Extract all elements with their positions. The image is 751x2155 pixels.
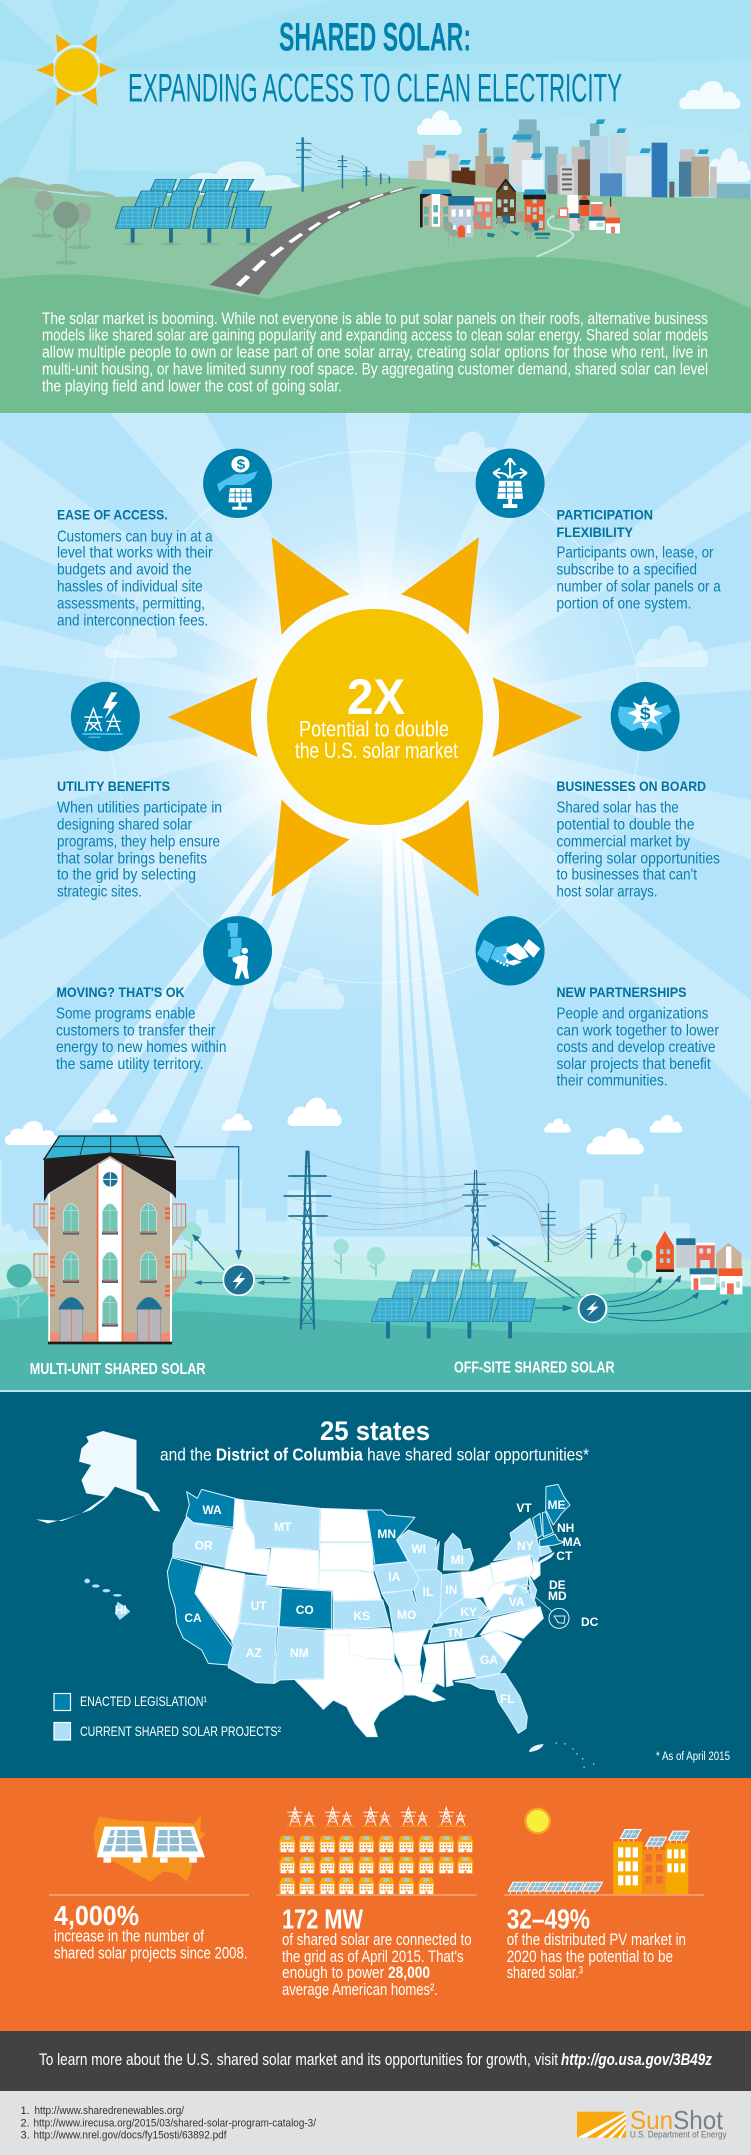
icon: utility towers with bolt (71, 682, 140, 751)
map state labels: MN (377, 1527, 396, 1541)
panel: state map section (0, 1392, 751, 1778)
text: moving (56, 984, 226, 1073)
stat: 32-49%: 32–49% (507, 1904, 590, 1935)
icon: US map with dollar sun: $ (640, 704, 651, 723)
footer references: http://www.sharedrenewables.org/ (34, 2105, 185, 2117)
map state labels: DE (549, 1578, 566, 1592)
call to action band: http://go.usa.gov/3B49z (561, 2050, 712, 2069)
icon: handshake (476, 916, 545, 986)
scene clouds (5, 1098, 682, 1154)
map legend (54, 1693, 281, 1740)
map state labels: NH (557, 1521, 574, 1535)
call to action band (0, 2031, 751, 2091)
intro text band (0, 308, 751, 413)
text: participation flexibility (556, 507, 721, 613)
text: new partnerships: can work together to lower (556, 1022, 720, 1039)
background bushes and trees (0, 177, 115, 265)
map state labels: WA (202, 1503, 222, 1517)
icon: sun, panels and buildings (507, 1808, 690, 1894)
map legend: CURRENT SHARED SOLAR PROJECTS² (80, 1723, 281, 1739)
stat: 172 MW: 172 MW (282, 1904, 363, 1935)
central sun: 2X: Potential to double (299, 717, 449, 742)
header sky background (0, 0, 751, 420)
map state labels: VA (509, 1595, 525, 1609)
multi-unit building (34, 1136, 186, 1344)
road (209, 187, 420, 295)
central sun: 2X (267, 609, 483, 825)
text: utility benefits: strategic sites. (57, 884, 142, 901)
map state labels: CT (556, 1549, 573, 1563)
text: utility benefits: When utilities participate in (57, 800, 222, 816)
text: utility benefits: that solar brings benefits (57, 851, 207, 868)
title: SHARED SOLAR: (279, 16, 471, 60)
text: new partnerships: NEW PARTNERSHIPS (556, 984, 686, 1000)
text: utility benefits: to the grid by selecting (57, 867, 196, 884)
text: participation flexibility: subscribe to a specified (556, 561, 697, 578)
text: ease of access: assessments, permitting, (57, 596, 205, 613)
footer references (0, 2091, 751, 2155)
text: new partnerships: solar projects that benefit (556, 1056, 711, 1073)
transmission towers (284, 1151, 637, 1329)
map state labels: VT (516, 1501, 532, 1515)
call to action band: To learn more about the U.S. shared solar market and its opportunities for growth, visit (39, 2050, 558, 2069)
text: ease of access: budgets and avoid the (57, 561, 192, 578)
left meter with arrows (174, 1147, 291, 1295)
text: participation flexibility: number of solar panels or a (556, 579, 721, 596)
map: eastern states (422, 1484, 570, 1733)
map footnote: * As of April 2015 (656, 1751, 730, 1763)
text: moving: the same utility territory. (56, 1056, 204, 1073)
map state labels: FL (500, 1692, 515, 1706)
icon: header sun (36, 34, 117, 106)
stat: 32-49% (507, 1904, 686, 1982)
title (128, 16, 622, 110)
text: businesses on board: BUSINESSES ON BOARD (556, 778, 706, 794)
footer references: 2. (20, 2118, 30, 2130)
light beams (55, 815, 490, 1240)
map state labels: MT (274, 1520, 292, 1534)
central sun: 2X: 2X (347, 669, 405, 725)
map state labels: ME (548, 1498, 566, 1512)
distant skyline (0, 1160, 690, 1257)
stat: 172 MW: the grid as of April 2015. That's (282, 1947, 464, 1966)
scene labels: MULTI-UNIT SHARED SOLAR (30, 1361, 206, 1378)
icon: hand with coin over panel: $ (237, 458, 245, 473)
scene labels: OFF-SITE SHARED SOLAR (454, 1360, 614, 1377)
map state labels: DC (581, 1615, 599, 1629)
map state labels: MA (563, 1535, 582, 1549)
text: businesses on board: commercial market by (556, 834, 690, 851)
stat: 4,000%: increase in the number of (54, 1927, 204, 1946)
icon: US map with panels (93, 1815, 206, 1882)
power poles (296, 137, 390, 192)
stat: 172 MW (282, 1904, 472, 1999)
SunShot logo: SunShot (630, 2105, 724, 2135)
icon: hand with coin over panel (203, 449, 272, 518)
icon: person carrying boxes (203, 916, 272, 986)
text: moving: energy to new homes within (56, 1039, 226, 1056)
text: businesses on board: offering solar opportunities (556, 851, 720, 868)
map state labels: NY (517, 1539, 534, 1553)
map: Alaska and Hawaii (36, 1431, 594, 1768)
text: participation flexibility: Participants own, lease, or (556, 544, 714, 562)
text: moving: customers to transfer their (56, 1022, 216, 1039)
text: participation flexibility: portion of one system. (556, 596, 692, 613)
map: western and central states (167, 1489, 445, 1737)
map state labels: OR (195, 1539, 213, 1553)
text: new partnerships: costs and develop creative (556, 1039, 716, 1056)
town houses (420, 178, 620, 257)
footer references: http://www.irecusa.org/2015/03/shared-solar-program-catalog-3/ (34, 2118, 317, 2130)
text: moving: MOVING? THAT'S OK (56, 984, 184, 1000)
map state labels: TN (447, 1626, 463, 1640)
map legend: ENACTED LEGISLATION¹ (80, 1693, 207, 1709)
map heading: and the District of Columbia have shared solar opportunities* (160, 1445, 589, 1465)
text: ease of access: and interconnection fees. (57, 613, 208, 630)
panel: statistics (0, 1778, 751, 2031)
map heading (160, 1416, 589, 1465)
scene trees (7, 1223, 652, 1318)
stat: 32-49%: of the distributed PV market in (507, 1930, 686, 1949)
map state labels: UT (251, 1599, 267, 1613)
stat: 4,000%: 4,000% (54, 1900, 139, 1931)
stat dividers (49, 1894, 704, 1896)
map state labels: MD (548, 1589, 567, 1603)
map state labels: CO (296, 1603, 314, 1617)
text: ease of access: level that works with their (57, 544, 213, 562)
stat: 32-49%: 2020 has the potential to be (507, 1947, 673, 1966)
wires (285, 1153, 634, 1259)
map state labels: AZ (246, 1646, 262, 1660)
map state labels: CA (184, 1611, 202, 1625)
text: utility benefits: programs, they help ensure (57, 834, 220, 851)
scene ground hills (0, 1241, 751, 1390)
map state labels: WI (411, 1542, 426, 1556)
map state labels: MO (397, 1608, 416, 1622)
right meter with arrows (487, 1235, 729, 1322)
text: participation flexibility: PARTICIPATION (556, 507, 653, 523)
intro text band: the playing field and lower the cost of going solar. (42, 377, 342, 395)
map state labels: KY (460, 1605, 477, 1619)
text: utility benefits: UTILITY BENEFITS (57, 778, 170, 794)
text: ease of access: Customers can buy in at a (57, 528, 213, 545)
scene labels (30, 1360, 614, 1378)
text: businesses on board: Shared solar has the (556, 800, 679, 816)
text: participation flexibility: FLEXIBILITY (556, 524, 634, 540)
map state labels: KS (353, 1609, 370, 1623)
map state labels: NM (290, 1646, 309, 1660)
icon: towers and homes (279, 1807, 473, 1894)
text: moving: Some programs enable (56, 1006, 195, 1022)
text: utility benefits: designing shared solar (57, 816, 193, 833)
SunShot logo (577, 2105, 727, 2140)
text: businesses on board (556, 778, 720, 901)
map state labels: MI (451, 1553, 464, 1567)
map state labels: IA (388, 1570, 401, 1584)
map heading: 25 states (320, 1416, 430, 1446)
text: new partnerships: their communities. (556, 1073, 668, 1090)
text: new partnerships (556, 984, 720, 1090)
orbit ring (109, 451, 641, 983)
sun rays (168, 537, 583, 897)
footer references: 3. (20, 2130, 30, 2142)
map state labels (115, 1498, 599, 1706)
footer references: 1. (20, 2105, 30, 2117)
map state labels: IL (423, 1585, 433, 1599)
map state labels: HI (115, 1603, 127, 1617)
map state labels: IN (445, 1583, 457, 1597)
map state labels: GA (480, 1653, 498, 1667)
stat: 32-49%: shared solar.³ (507, 1963, 583, 1982)
text: new partnerships: People and organizations (556, 1006, 708, 1022)
city skyline (408, 119, 750, 200)
main sky with sun rays (0, 413, 751, 1213)
text: businesses on board: host solar arrays. (556, 884, 658, 901)
stat: 4,000% (54, 1900, 248, 1963)
stat: 172 MW: of shared solar are connected to (282, 1930, 472, 1949)
solar array (115, 179, 272, 246)
stat: 4,000%: shared solar projects since 2008. (54, 1944, 248, 1963)
text: businesses on board: to businesses that can't (556, 867, 697, 884)
footer references: http://www.nrel.gov/docs/fy15osti/63892.pdf (34, 2130, 227, 2142)
text: businesses on board: potential to double the (556, 816, 695, 833)
pale clouds in main section (104, 431, 708, 1009)
SunShot logo: U.S. Department of Energy (630, 2130, 727, 2140)
icon: arrows from panel (476, 449, 545, 518)
off-site solar array (371, 1270, 535, 1338)
stat: 172 MW: enough to power 28,000 (282, 1963, 430, 1982)
hills (0, 178, 751, 420)
text: ease of access: EASE OF ACCESS. (57, 507, 168, 523)
icon: US map with dollar sun (611, 682, 680, 751)
text: ease of access: hassles of individual site (57, 579, 203, 596)
header clouds (175, 81, 751, 197)
stat: 172 MW: average American homes². (282, 1980, 438, 1999)
central sun: 2X: the U.S. solar market (295, 738, 458, 763)
text: utility benefits (57, 778, 222, 901)
off-site houses (656, 1231, 742, 1294)
text: ease of access (57, 507, 213, 630)
